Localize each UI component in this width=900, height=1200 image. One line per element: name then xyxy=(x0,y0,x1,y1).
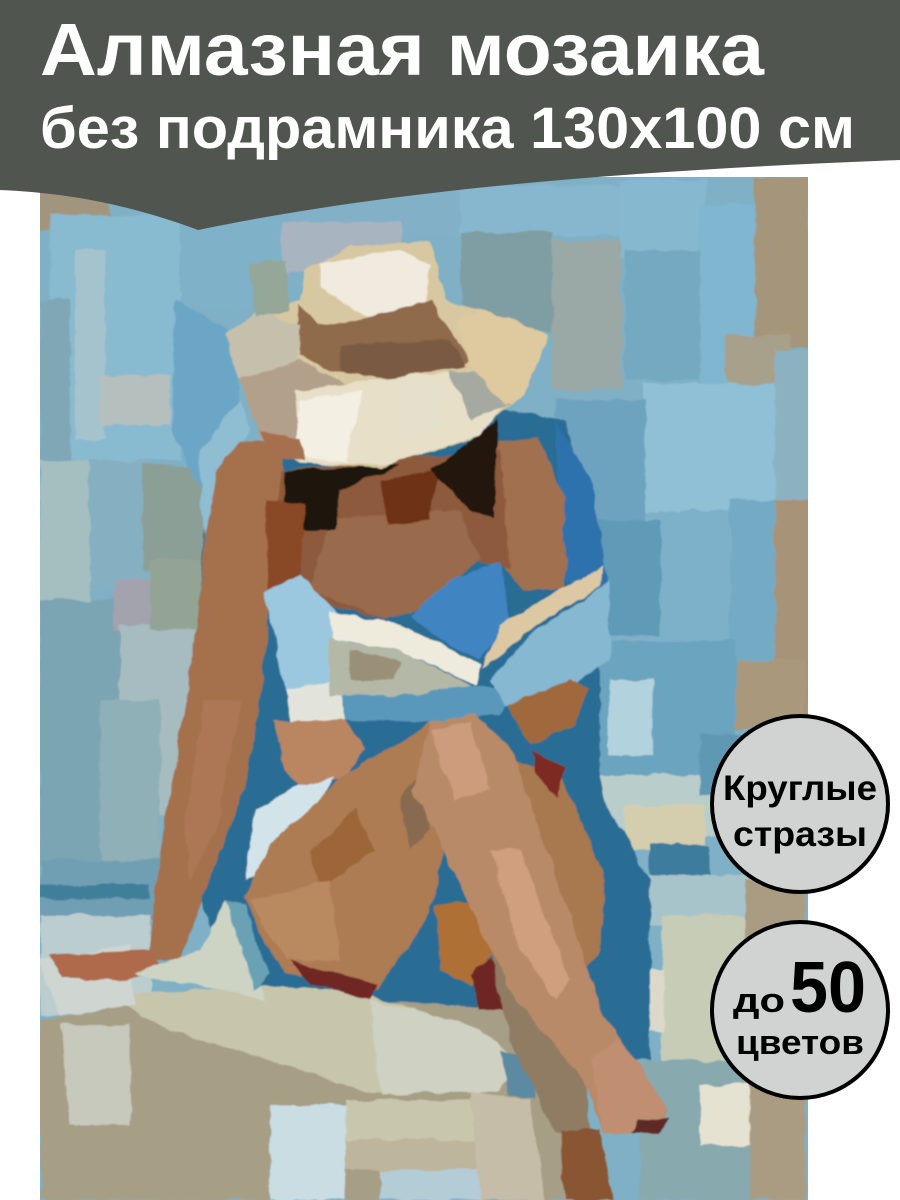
painting: far leg xyxy=(435,750,612,1200)
painting: torso xyxy=(270,450,510,620)
painting: right arm xyxy=(487,438,565,590)
badge: up to 50 colours xyxy=(712,922,888,1098)
subtitle: без подрамника 130х100 см xyxy=(40,96,855,161)
painting: straw hat xyxy=(225,243,548,468)
painting: shorts xyxy=(245,778,335,880)
badge: up to 50 colours: 50 xyxy=(790,948,866,1028)
painting: woman reading in a straw hat xyxy=(30,170,810,1200)
painting: hair xyxy=(265,420,498,610)
badge: round rhinestones: Круглые xyxy=(723,769,877,808)
badge: round rhinestones xyxy=(712,716,888,892)
painting: brown belly under book xyxy=(507,678,590,745)
badge: round rhinestones: стразы xyxy=(733,815,867,854)
painting: waist skin xyxy=(274,720,365,785)
painting background brush strokes xyxy=(30,170,810,1200)
painting: near thigh xyxy=(243,721,444,1000)
painting: dark blue shadow behind figure xyxy=(170,300,650,1060)
badge: up to 50 colours: цветов xyxy=(736,1024,864,1062)
painting: near lower leg and foot xyxy=(413,715,670,1133)
painting: blue swimsuit top xyxy=(263,562,510,700)
painting: stone ledge at the bottom xyxy=(40,945,590,1200)
painting: left arm xyxy=(50,440,285,980)
painting: swimsuit waist and book xyxy=(285,565,610,722)
painting: hip fabric and hand area xyxy=(135,900,265,1000)
title: Алмазная мозаика xyxy=(40,8,765,91)
header banner xyxy=(0,0,900,230)
badge: up to 50 colours: до xyxy=(733,982,785,1020)
